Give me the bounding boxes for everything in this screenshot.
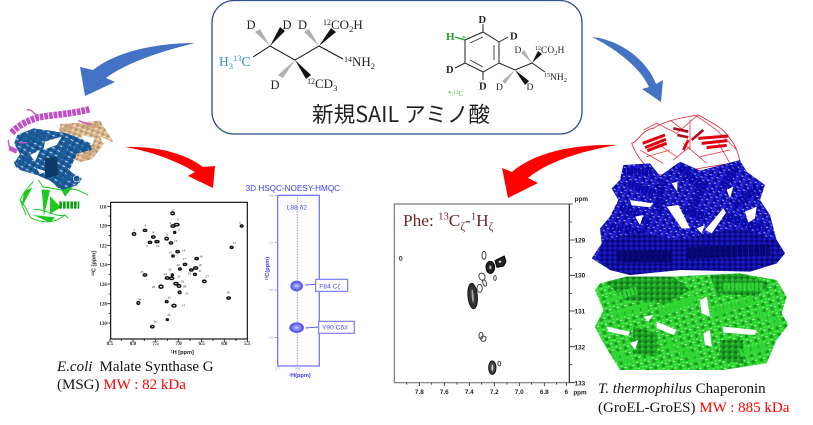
spectrum axis labels	[415, 196, 588, 397]
molecule: SAIL phenylalanine: D	[510, 32, 518, 42]
caption: chaperonin: (GroEL-GroES)	[598, 400, 699, 416]
subunit: GroEL green ring	[595, 273, 788, 370]
axis numbers: 6.0	[221, 342, 228, 347]
spectrum title: H	[476, 211, 489, 230]
peak labels: 2	[172, 208, 174, 212]
caption: MSG: (MSG)	[57, 377, 103, 393]
strip y axis: 120	[269, 193, 274, 197]
peak labels: 9	[146, 244, 148, 248]
peak labels: 7	[178, 228, 180, 232]
peak labels: 10	[156, 244, 160, 248]
molecule: SAIL leucine: 2	[349, 24, 353, 34]
molecule: SAIL phenylalanine: 15	[544, 73, 550, 79]
molecule: SAIL phenylalanine: CO	[541, 46, 554, 56]
callout: Y90: Y90 Cδ#	[322, 325, 348, 332]
molecule: SAIL phenylalanine: D	[526, 83, 534, 93]
caption: chaperonin: T. thermophilus Chaperonin	[598, 381, 766, 397]
green ring: gaps	[607, 297, 757, 350]
contours	[399, 251, 506, 374]
peak labels: 33	[182, 303, 185, 307]
molecule: SAIL leucine: 12	[323, 18, 331, 27]
strip y axis	[269, 193, 301, 370]
molecule: SAIL leucine: NH	[352, 54, 371, 69]
axis numbers: 128	[99, 303, 107, 308]
spectrum title: 13	[438, 211, 449, 222]
molecule: SAIL phenylalanine: D	[446, 65, 454, 76]
spectrum axis labels: 7.2	[490, 389, 499, 396]
strip x axis: 1	[289, 373, 291, 377]
spectrum axis labels: ppm	[575, 196, 588, 203]
molecule: SAIL phenylalanine: 2	[564, 77, 567, 84]
strip x axis: H(ppm)	[291, 373, 311, 379]
caption: chaperonin: MW : 885 kDa	[699, 400, 790, 416]
peak labels: 22	[168, 268, 172, 272]
peak labels: 36	[153, 320, 157, 324]
axis numbers: 130	[99, 322, 107, 327]
caption: MSG: E.coli	[56, 359, 92, 375]
spectrum ticks	[407, 204, 575, 386]
strip title: 3D HSQC-NOESY-HMQC	[246, 184, 340, 193]
peak labels: 11	[165, 232, 169, 236]
caption: MSG: MW : 82 kDa	[103, 377, 186, 393]
domain: green	[20, 180, 88, 223]
molecule: SAIL phenylalanine: 13	[453, 91, 459, 96]
chart: 2D spectrum of MSG	[91, 202, 251, 356]
spectrum axis labels: 6	[565, 389, 569, 396]
y axis title: C [ppm]	[92, 251, 98, 272]
molecule: SAIL phenylalanine: *:	[448, 90, 453, 98]
strip y axis: 125	[269, 241, 274, 245]
axis numbers: 8.0	[130, 342, 137, 347]
peak labels: 31	[185, 291, 189, 295]
spectrum axis labels: 130	[575, 273, 586, 280]
peak labels: 21	[198, 269, 202, 273]
spectrum axis labels: 131	[575, 309, 586, 316]
spectrum axis labels: ppm	[573, 390, 587, 397]
molecule: SAIL phenylalanine: 12	[535, 46, 541, 52]
molecule: SAIL leucine: D	[282, 18, 292, 32]
callout: F84: F84 Cζ	[319, 283, 340, 290]
molecule: SAIL phenylalanine: *	[462, 34, 466, 43]
spectrum axis labels: 133	[575, 380, 586, 387]
chart: 3D HSQC-NOESY-HMQC strip: 13	[265, 277, 269, 280]
peak labels: 32	[167, 295, 171, 299]
molecule: SAIL phenylalanine: D	[514, 46, 522, 56]
x axis title: H [ppm]	[173, 350, 194, 356]
peak labels: 13	[232, 241, 236, 245]
peak labels: 29	[152, 285, 156, 289]
strip y axis: 135	[269, 335, 274, 339]
peak labels: 35	[167, 313, 171, 317]
axis numbers: 8.5	[107, 342, 114, 347]
molecule: SAIL phenylalanine: 2	[554, 50, 557, 57]
peak labels: 26	[181, 280, 184, 284]
peak labels: 23	[140, 270, 144, 274]
molecule: SAIL phenylalanine: D	[479, 82, 487, 92]
spectrum axis labels: 7.6	[440, 389, 449, 396]
peak labels: 12	[174, 239, 178, 243]
axis numbers	[99, 205, 251, 347]
peak: F84	[290, 281, 303, 291]
spectrum title: ζ	[489, 221, 494, 233]
molecule: SAIL leucine: 12	[307, 77, 315, 86]
peak labels: 34	[138, 297, 142, 301]
subunit: GroES red cap	[632, 115, 740, 175]
axis numbers: 122	[99, 244, 107, 249]
molecule: SAIL phenylalanine: NH	[550, 73, 564, 83]
chart: Phe 13C-1H spectrum	[394, 196, 588, 397]
subunit: GroEL blue ring	[592, 160, 785, 275]
axis numbers: 126	[99, 283, 107, 288]
blue ring: gaps	[630, 182, 757, 233]
protein: GroEL-GroES chaperonin	[592, 115, 788, 370]
caption: MSG: Malate Synthase G	[100, 359, 214, 375]
peak labels: 27	[206, 275, 209, 279]
arrow: red right	[502, 145, 617, 198]
spectrum title: -	[465, 211, 471, 230]
peak labels: 14	[182, 248, 186, 252]
strip y axis: 0.70	[275, 366, 281, 370]
axis numbers: 124	[99, 264, 107, 269]
axis numbers: 118	[99, 205, 107, 210]
molecule: SAIL leucine: 3	[229, 61, 233, 71]
spectrum axis labels: 7.8	[415, 389, 424, 396]
chart: 3D HSQC-NOESY-HMQC strip	[246, 184, 354, 379]
arrow: blue left	[80, 43, 195, 96]
strip y axis: 130	[269, 288, 274, 292]
spectrum axis labels: 6.8	[540, 389, 549, 396]
peak labels: 19	[188, 271, 191, 275]
peak labels: 5	[177, 218, 179, 222]
axis numbers: 120	[99, 225, 107, 230]
spectrum axis labels: 129	[575, 237, 586, 244]
peak labels: 3	[133, 227, 135, 231]
molecule: SAIL leucine: D	[246, 18, 256, 32]
spectrum title: 1	[471, 211, 476, 222]
peak labels: 25	[177, 275, 181, 279]
peak labels: 8	[152, 231, 154, 235]
heading: new SAIL amino acids: 新規SAIL アミノ酸	[312, 98, 490, 129]
peak labels: 4	[169, 221, 171, 225]
callout: Y90	[319, 321, 354, 333]
molecule: SAIL leucine	[219, 17, 375, 93]
molecule: SAIL leucine: C	[242, 54, 251, 69]
peaks	[132, 212, 243, 328]
spectrum axis labels: 132	[575, 344, 586, 351]
spectrum axis labels: 7.4	[465, 389, 474, 396]
axis numbers: 6.5	[199, 342, 205, 347]
molecule: SAIL phenylalanine: D	[496, 83, 503, 93]
molecule: SAIL leucine: 2	[371, 61, 375, 71]
molecule: SAIL leucine: D	[298, 18, 307, 32]
spectrum axis labels: 7.0	[515, 389, 524, 396]
domain: magenta helices	[8, 109, 92, 153]
axis numbers: 5.5	[244, 342, 251, 347]
peak labels: 17	[183, 257, 186, 261]
chart: 3D HSQC-NOESY-HMQC strip: C(ppm)	[265, 257, 271, 277]
spectrum title: Phe:	[403, 211, 434, 230]
molecule: SAIL leucine: H	[353, 17, 363, 32]
peak labels	[133, 208, 241, 324]
axis numbers: 7.5	[153, 342, 159, 347]
protein: malate synthase G	[8, 109, 113, 223]
spectrum title: C	[449, 211, 460, 230]
peak labels: 20	[177, 263, 180, 267]
peak labels: 30	[226, 291, 230, 295]
chart ticks	[107, 206, 247, 342]
molecule: SAIL phenylalanine	[446, 15, 567, 98]
arrow: red left	[125, 147, 215, 188]
spectrum title: ζ	[460, 221, 465, 233]
y axis title: 13	[91, 272, 95, 276]
axis numbers: 7.0	[176, 342, 182, 347]
molecule: SAIL leucine: CD	[315, 76, 333, 91]
green ring: helices	[608, 287, 780, 363]
peak labels: 18	[198, 263, 202, 267]
x axis title: 1	[171, 349, 173, 353]
strip y axis: 0.55	[295, 366, 301, 370]
molecule: SAIL phenylalanine: H	[557, 46, 564, 56]
molecule: SAIL phenylalanine: D	[478, 15, 486, 26]
peak: Y90	[289, 322, 304, 333]
domain: blue core	[14, 128, 92, 190]
molecule: SAIL leucine: H	[219, 54, 229, 69]
molecule: SAIL leucine: D	[270, 78, 280, 92]
molecule: SAIL leucine: 3	[333, 83, 337, 93]
molecule: SAIL leucine: 14	[344, 55, 352, 64]
peak labels: 16	[199, 255, 203, 259]
peak labels: 15	[169, 250, 172, 254]
peak labels: 24	[163, 272, 167, 276]
molecule: SAIL leucine: 13	[233, 53, 242, 63]
resonance label: L88 δ2	[287, 204, 307, 211]
molecule: SAIL phenylalanine: C	[458, 90, 463, 98]
molecule: SAIL phenylalanine: H	[446, 31, 455, 43]
panel: SAIL amino acids	[212, 0, 582, 134]
peak labels: 28	[183, 284, 187, 288]
peak labels: 4	[144, 224, 146, 228]
callout: F84	[316, 279, 348, 291]
peak labels: 6	[239, 220, 241, 224]
molecule: SAIL leucine: CO	[331, 17, 349, 32]
blue ring: helices	[610, 167, 763, 233]
domain: tan	[59, 121, 113, 162]
arrow: blue right	[592, 37, 663, 102]
domain: dark core	[45, 157, 58, 178]
